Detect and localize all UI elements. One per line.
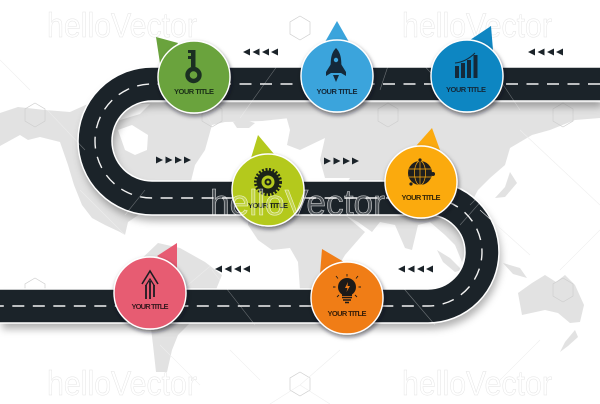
disc — [232, 154, 304, 226]
watermark: centre: helloVector — [210, 182, 385, 223]
road shadow — [2, 90, 600, 312]
road centre dashes — [0, 84, 600, 306]
label: YOUR TITLE — [446, 85, 486, 94]
label: YOUR TITLE — [316, 87, 358, 96]
marker: green key — [156, 37, 230, 113]
disc — [158, 41, 230, 113]
watermark: bottom right: helloVector — [402, 365, 552, 403]
direction arrows: bottom, right — [398, 266, 433, 272]
disc — [301, 40, 373, 112]
icon: globe — [408, 158, 435, 186]
world map background — [0, 103, 600, 372]
direction arrows: middle, right — [324, 158, 359, 164]
label: YOUR TITLE — [174, 87, 214, 96]
pointer — [470, 26, 493, 50]
pointer — [156, 37, 178, 70]
pointer — [416, 128, 440, 150]
label: YOUR TITLE — [248, 201, 288, 210]
marker: lime gear — [232, 135, 304, 226]
road surface — [0, 84, 600, 306]
watermark: top left: helloVector — [47, 7, 197, 45]
disc — [114, 257, 186, 329]
icon: light bulb — [333, 274, 361, 302]
label: YOUR TITLE — [402, 193, 440, 202]
marker: pink arrow — [114, 243, 186, 329]
marker: blue rocket — [301, 21, 373, 112]
marker: deep blue chart — [431, 26, 503, 112]
direction arrows: top, right — [528, 48, 563, 56]
watermark: bottom left: helloVector — [47, 365, 197, 403]
marker: orange bulb — [311, 249, 383, 334]
icon: key — [188, 50, 200, 81]
disc — [385, 146, 457, 218]
marker: amber globe — [385, 128, 457, 218]
pointer — [325, 21, 349, 42]
icon: rocket — [326, 48, 346, 82]
road — [0, 84, 600, 312]
disc — [311, 262, 383, 334]
pointer — [157, 243, 177, 268]
road white edge — [0, 84, 600, 306]
disc — [431, 40, 503, 112]
direction arrows: middle, left — [156, 156, 191, 164]
direction arrows: bottom, left — [215, 266, 250, 272]
icon: bar chart — [455, 53, 478, 78]
pointer — [251, 135, 274, 158]
watermark: top right: helloVector — [402, 7, 552, 45]
icon: upward arrow — [142, 271, 158, 299]
label: YOUR TITLE — [328, 309, 366, 318]
label: YOUR TITLE — [132, 302, 168, 311]
direction arrows: top, first gap — [243, 48, 278, 56]
icon: gear — [256, 170, 280, 194]
pointer — [320, 249, 344, 274]
